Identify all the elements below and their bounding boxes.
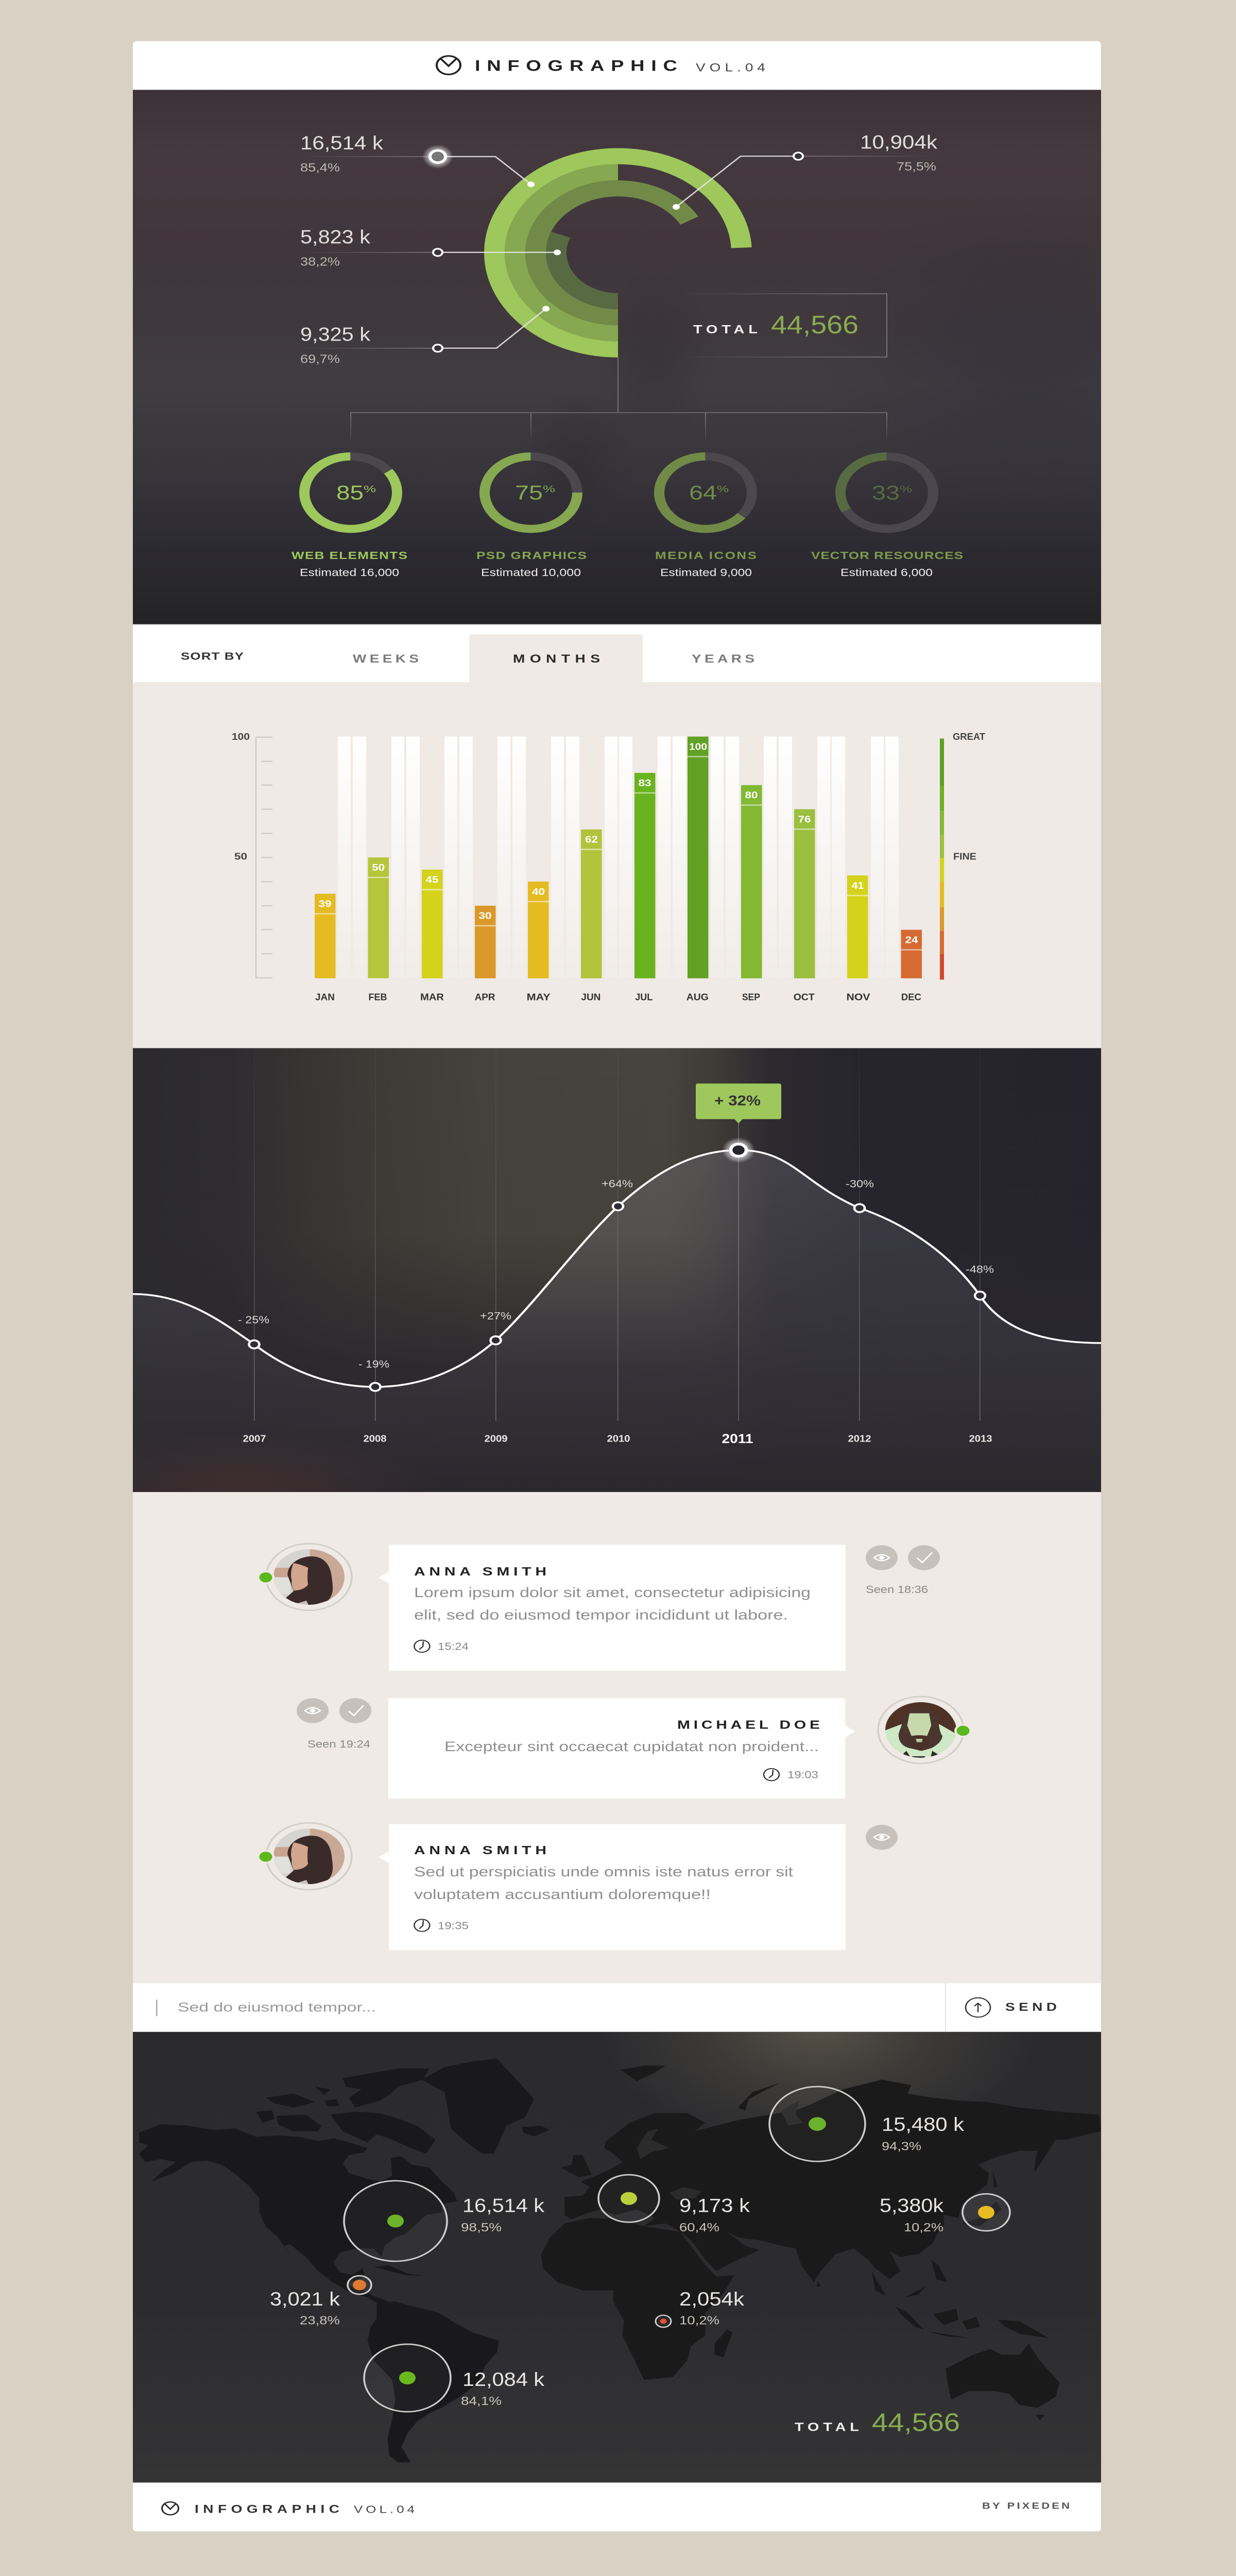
map total: 44,566 [872,2408,960,2436]
label: 9,173 k: 60,4% [679,2221,719,2234]
label: 3,021 k: 3,021 k [270,2289,340,2310]
placeholder: Sed do eiusmod tempor... [178,2001,376,2015]
highlighted point [722,1137,755,1163]
label: 16,514 k [461,2195,544,2234]
label: 12,084 k: 84,1% [461,2394,502,2408]
y axis: 100 [232,731,250,742]
point labels: - 19% [358,1358,389,1370]
point labels: +27% [480,1310,511,1321]
bar: jul 83: 83 [639,777,651,788]
tab: months: MONTHS [513,653,600,665]
label: 9,325 k: 9,325 k [300,324,370,345]
year labels: 2012 [848,1433,871,1444]
bar: jan 39 [315,894,336,978]
marker: europe [598,2175,659,2222]
message: anna smith 1: elit, sed do eiusmod tempor incididunt ut labore. [414,1607,788,1623]
label: 15,480 k [882,2114,964,2153]
chart: curve [133,1150,1101,1387]
marker: africa [656,2315,671,2327]
year labels: 2010 [607,1433,630,1444]
panel: donut summary [133,90,1101,624]
month labels: DEC [901,992,921,1003]
bar: mar 45 [422,870,443,978]
footer credit: BY PIXEDEN [982,2501,1070,2511]
icon: eye status [866,1825,898,1850]
white column stripes [338,737,899,978]
message: michael doe [388,1698,855,1799]
gauge: media icons: % [717,484,729,495]
connector tree [350,358,887,443]
header bar [133,41,1101,93]
icon: logo clock [437,56,460,75]
bar: oct 76: 76 [798,814,811,825]
marker: central america [348,2276,371,2294]
tooltip: + 32% [714,1092,761,1108]
panel: world map [133,1908,1101,2483]
month labels: FEB [369,992,387,1003]
chart: radial rings [494,156,742,349]
marker: south america [364,2344,451,2412]
message: anna smith 1: ANNA SMITH [414,1565,546,1578]
message: anna smith 1 [379,1545,846,1671]
message input bar [133,1983,1101,2032]
icon: clock [764,1769,779,1781]
gauge: vector resources [811,456,963,578]
total box [679,294,887,358]
bar: may 40: 40 [532,886,545,897]
message: anna smith 2: voluptatem accusantium doloremque!! [414,1887,711,1902]
status icons: seen 18:36: Seen 18:36 [866,1584,928,1596]
month labels: AUG [686,992,709,1003]
label: 9,325 k [301,327,370,365]
bar: jun 62: 62 [585,834,598,845]
gauge: psd graphics: % [543,484,555,495]
label: 15,480 k: 15,480 k [882,2114,964,2136]
month labels: JUL [635,992,653,1003]
label: 5,823 k [301,230,370,267]
data points [249,1202,985,1391]
icon: footer logo [162,2502,179,2515]
bar: apr 30 [475,906,495,978]
month labels: JUN [581,992,600,1003]
label: 3,021 k [270,2289,340,2327]
point labels: +64% [602,1178,633,1190]
status icons: seen 19:24 [297,1698,371,1750]
gauge: vector resources: % [900,484,912,495]
panel: yearly line chart [133,1048,1101,1492]
label: 5,380k: 10,2% [904,2221,943,2234]
label: 16,514 k: 98,5% [461,2221,502,2234]
bar: dec 24 [901,930,922,978]
point labels: -30% [846,1178,874,1190]
message: michael doe: Excepteur sint occaecat cupidatat non proident... [444,1739,819,1754]
status icons: seen 18:36 [866,1545,940,1596]
month labels: NOV [846,992,870,1003]
year labels: 2011 [722,1432,753,1446]
sort label: SORT BY [181,650,244,662]
year labels: 2013 [969,1433,992,1444]
message: anna smith 2: 19:35 [438,1920,469,1931]
bar: dec 24: 24 [905,935,918,945]
year guide lines [254,1048,981,1421]
message: anna smith 2: ANNA SMITH [414,1843,546,1857]
message: michael doe: MICHAEL DOE [677,1718,820,1732]
label: 5,823 k: 5,823 k [300,227,370,248]
leader lines and nodes [300,144,937,352]
label: 9,173 k [679,2195,750,2234]
label: 15,480 k: 94,3% [882,2140,921,2153]
gauge: vector resources: Estimated 6,000 [840,567,933,578]
message: anna smith 2: Sed ut perspiciatis unde omnis iste natus error sit [414,1865,794,1879]
bar: sep 80 [741,785,762,978]
label: 2,054k: 2,054k [679,2289,744,2310]
label: 2,054k: 10,2% [679,2314,719,2327]
label: 9,173 k: 9,173 k [679,2195,750,2216]
bar: jul 83 [634,773,655,978]
bar: feb 50 [368,857,389,978]
label: 12,084 k [461,2369,544,2408]
legend scale: GREAT [953,731,985,742]
footer title: INFOGRAPHIC [195,2503,339,2516]
label: 10,904k: 75,5% [897,160,936,173]
title: INFOGRAPHIC [475,57,677,74]
gauge: vector resources: VECTOR RESOURCES [811,550,963,562]
month labels: APR [475,992,495,1003]
bar: oct 76 [794,809,815,978]
year labels [243,1432,992,1446]
icon: send arrow [966,1998,990,2017]
label: 16,514 k: 16,514 k [462,2195,544,2216]
gauge: media icons: 64 [689,481,717,504]
total box: TOTAL [693,323,758,336]
marker: russia [769,2087,865,2161]
y axis [232,731,272,978]
label: 12,084 k: 12,084 k [462,2369,544,2391]
label: 5,823 k: 38,2% [300,255,340,268]
bar: jan 39: 39 [318,899,332,909]
bar: aug 100: 100 [689,741,707,752]
bar: apr 30: 30 [478,910,492,921]
tab: weeks: WEEKS [353,653,419,665]
legend scale: FINE [953,851,976,862]
marker: north america [344,2181,447,2261]
gauge: web elements: 85 [336,481,364,504]
icon: clock [414,1640,430,1652]
legend scale [940,731,985,980]
point labels: - 25% [238,1314,269,1326]
avatar: anna smith 1 [257,1544,352,1611]
marker: japan [963,2194,1010,2231]
message: anna smith 1: Lorem ipsum dolor sit amet, consectetur adipisicing [414,1585,811,1600]
message: anna smith 1: 15:24 [438,1640,469,1652]
total box: 44,566 [771,310,859,338]
gauge: psd graphics: Estimated 10,000 [481,567,581,578]
footer bar [133,2483,1101,2531]
month labels: MAY [527,992,551,1003]
avatar: anna smith 2 [257,1823,352,1890]
bar: nov 41: 41 [852,880,864,891]
message: anna smith 2 [379,1824,846,1950]
avatar: michael doe [878,1697,972,1764]
gauge: web elements [291,456,407,578]
gauge: media icons: MEDIA ICONS [655,550,757,562]
icon: clock [414,1919,430,1931]
bar: aug 100 [688,737,709,978]
map: americas and greenland [139,2059,550,2462]
map: eurasia, africa, oceania [541,2065,1101,2420]
active tab [469,634,643,682]
y axis: 50 [234,851,247,862]
bar: jun 62 [581,829,602,978]
year labels: 2008 [364,1433,387,1444]
point labels [238,1178,994,1370]
point labels: -48% [966,1263,994,1275]
panel: monthly bar chart [133,682,1101,1048]
label: 10,904k [862,135,937,172]
month labels: JAN [315,992,335,1003]
gauge: web elements: % [364,484,376,495]
footer volume: VOL.04 [354,2503,415,2515]
gauge: media icons [655,456,757,578]
label: 10,904k: 10,904k [860,131,937,153]
bar: nov 41 [847,875,868,978]
label: 5,380k: 5,380k [880,2195,943,2216]
gauge: psd graphics [476,456,587,578]
tab bar [133,624,1101,682]
tooltip [696,1083,781,1123]
message: michael doe: 19:03 [787,1769,818,1781]
map total: TOTAL [795,2420,859,2434]
month labels: OCT [794,992,815,1003]
gauge: web elements: WEB ELEMENTS [291,550,407,562]
month labels [315,992,921,1003]
gauge: psd graphics: PSD GRAPHICS [476,550,587,562]
bar: sep 80: 80 [745,790,758,801]
label: 5,380k [880,2195,943,2234]
gauge: media icons: Estimated 9,000 [660,567,752,578]
send label: SEND [1005,2001,1057,2013]
label: 16,514 k: 16,514 k [300,132,383,154]
gauge: vector resources: 33 [872,481,900,504]
month labels: MAR [420,992,444,1003]
year labels: 2009 [484,1433,508,1444]
label: 3,021 k: 23,8% [300,2314,340,2327]
label: 16,514 k [301,135,383,173]
volume label: VOL.04 [696,61,765,74]
gauge: web elements: Estimated 16,000 [300,567,399,578]
year labels: 2007 [243,1433,266,1444]
gauge: psd graphics: 75 [515,481,543,504]
month labels: SEP [742,992,760,1003]
bar: may 40 [528,882,549,978]
chart: area under curve [133,1150,1101,1492]
panel: chat [133,1492,1101,1983]
map total [795,2408,960,2436]
bar: mar 45: 45 [425,874,439,885]
label: 9,325 k: 69,7% [300,352,340,366]
label: 2,054k [679,2289,744,2327]
label: 16,514 k: 85,4% [300,161,340,174]
status icons: seen 19:24: Seen 19:24 [307,1738,370,1750]
bar: feb 50: 50 [372,862,385,873]
tab: years: YEARS [692,653,754,665]
